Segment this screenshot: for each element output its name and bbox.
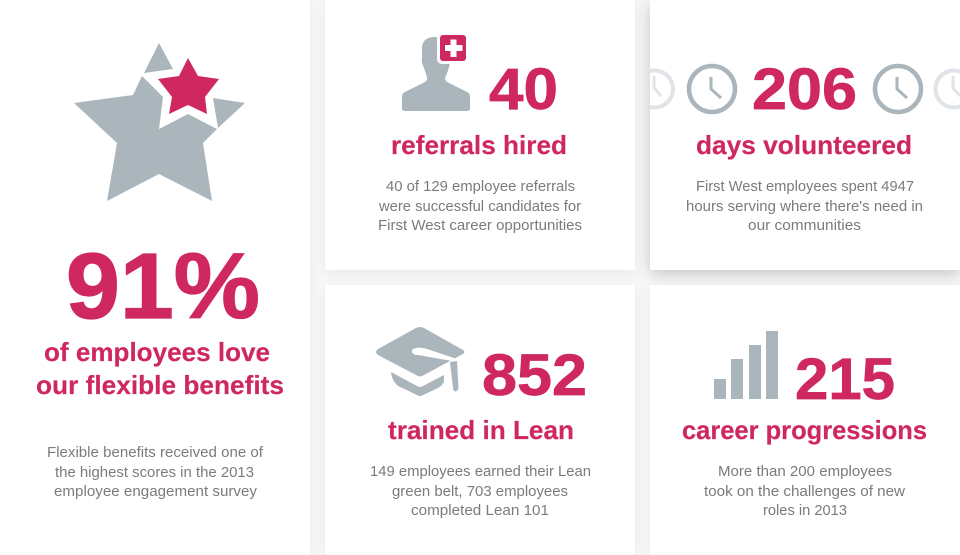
heading: of employees love — [44, 337, 270, 367]
panel: days volunteered — [650, 0, 960, 270]
number 206: 206 — [752, 57, 857, 122]
description: 40 of 129 employee referrals — [386, 179, 575, 195]
description: employee engagement survey — [54, 484, 258, 500]
description: 149 employees earned their Lean — [370, 464, 591, 480]
icon: person with plus — [402, 32, 470, 111]
heading: our flexible benefits — [36, 370, 284, 400]
panel: referrals hired — [325, 0, 635, 270]
heading: trained in Lean — [388, 415, 574, 445]
description — [686, 179, 923, 234]
icon: clock right — [875, 66, 921, 112]
icon: faded clock right — [936, 70, 960, 108]
heading — [36, 337, 284, 400]
description: First West career opportunities — [378, 218, 582, 234]
panel: trained in Lean — [325, 285, 635, 555]
description: hours serving where there's need in — [686, 199, 923, 215]
big number 91%: 91% — [66, 234, 260, 338]
panel: career progressions — [650, 285, 960, 555]
description: our communities — [748, 218, 861, 234]
number 40: 40 — [489, 57, 558, 122]
panel: flexible benefits — [0, 0, 310, 555]
description — [704, 464, 906, 519]
description: took on the challenges of new — [704, 484, 906, 500]
description — [378, 179, 582, 234]
icon: bar chart — [714, 331, 778, 399]
icon: graduation cap — [376, 327, 464, 396]
icon: faded clock left — [636, 70, 673, 108]
description: Flexible benefits received one of — [47, 445, 264, 461]
heading: career progressions — [682, 415, 927, 445]
description: More than 200 employees — [718, 464, 892, 480]
number 215: 215 — [795, 347, 895, 412]
icon: stars — [74, 43, 245, 201]
description — [47, 445, 264, 500]
icon: clock left — [689, 66, 735, 112]
description: green belt, 703 employees — [392, 484, 568, 500]
description: completed Lean 101 — [411, 503, 549, 519]
description: roles in 2013 — [763, 503, 847, 519]
heading: referrals hired — [391, 130, 567, 160]
description: the highest scores in the 2013 — [55, 465, 254, 481]
number 852: 852 — [482, 343, 587, 408]
description — [370, 464, 591, 519]
heading: days volunteered — [696, 130, 912, 160]
description: First West employees spent 4947 — [696, 179, 914, 195]
description: were successful candidates for — [378, 199, 581, 215]
